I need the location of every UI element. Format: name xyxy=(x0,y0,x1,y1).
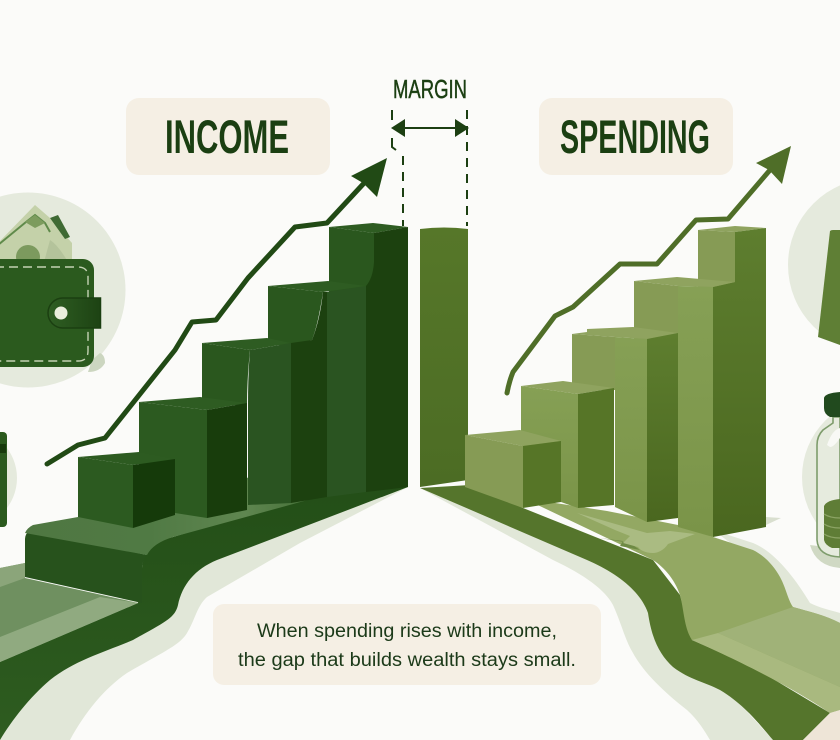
income bar 3 xyxy=(202,338,291,505)
spending bar 4 xyxy=(634,277,735,537)
label: income: INCOME xyxy=(165,110,289,163)
income bar 1 xyxy=(78,452,175,528)
ribbon: spending path shadow xyxy=(420,488,773,740)
income bar 4 xyxy=(268,281,366,503)
spending bar 1 xyxy=(465,430,561,508)
income bar 2 xyxy=(139,397,247,518)
icon: card on left edge xyxy=(0,428,17,528)
label: margin: MARGIN xyxy=(393,74,467,104)
shadow: right bar xyxy=(766,517,781,525)
icon: wallet with cash xyxy=(0,192,126,388)
icon: glass jar with coins xyxy=(802,392,840,568)
income bar 5 xyxy=(329,223,408,492)
ribbon: income path shadow xyxy=(0,487,408,740)
ribbon: spending path shadow right xyxy=(713,530,840,640)
ribbon: income path xyxy=(0,470,408,740)
callout: When spending rises with income, xyxy=(257,621,557,642)
icon: spoon on path xyxy=(577,513,695,553)
callout xyxy=(213,604,601,685)
arrow: margin dimension with dashed guides xyxy=(391,110,469,226)
arrow: spending trend line xyxy=(507,146,791,393)
spending bar 2 xyxy=(521,381,614,508)
spending bars xyxy=(465,226,766,537)
spending bar 5 xyxy=(698,226,766,537)
callout: the gap that builds wealth stays small. xyxy=(238,650,576,671)
label: income xyxy=(126,98,330,175)
label: spending: SPENDING xyxy=(560,110,710,163)
icon: right edge panel xyxy=(788,178,840,352)
income bars xyxy=(78,223,408,528)
ribbon: spending path xyxy=(420,485,840,740)
label: spending xyxy=(539,98,733,175)
arrow: income trend line xyxy=(47,158,387,464)
spending bar 3 xyxy=(572,327,678,522)
bar: margin center column xyxy=(420,228,468,487)
